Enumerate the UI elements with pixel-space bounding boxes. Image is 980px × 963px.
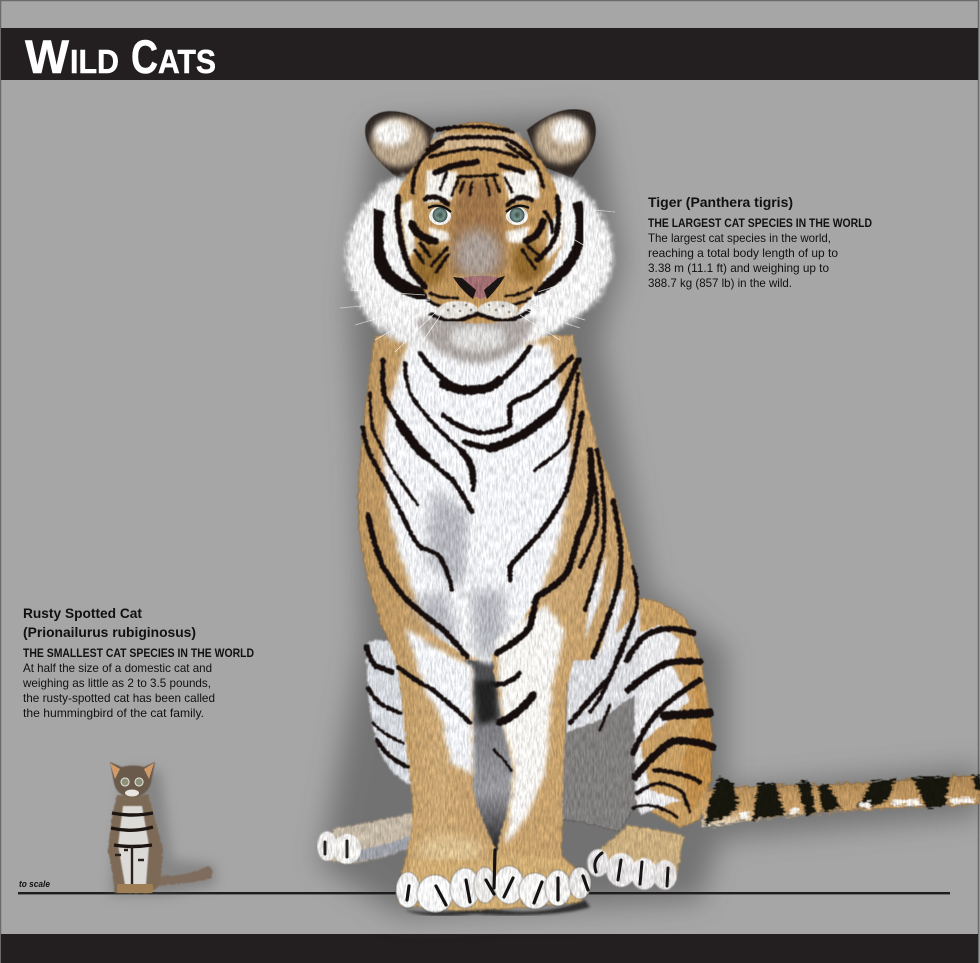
cat eyes [121,778,143,786]
nose [453,276,505,299]
cat subheading: THE SMALLEST CAT SPECIES IN THE WORLD [23,646,254,660]
tiger description: 3.38 m (11.1 ft) and weighing up to [648,261,829,275]
face base [397,122,564,324]
tiger description: reaching a total body length of up to [648,246,838,260]
cat description [22,661,215,720]
rear right paw [596,825,684,880]
chest center seam [464,510,476,640]
cat name: Rusty Spotted Cat [23,605,142,621]
right flank white bands [585,555,626,660]
cat leg lines [115,846,144,885]
tiger text block [648,194,872,290]
cat description: the hummingbird of the cat family. [23,706,204,720]
tiger stripes [363,347,713,817]
cat chest [118,806,149,885]
center gap between front legs [468,650,520,850]
left foot light patch [416,836,484,864]
title: ILD [70,43,119,80]
cat description: At half the size of a domestic cat and [23,661,212,675]
front right leg [492,600,590,895]
white mane [345,160,614,355]
left ear [365,111,435,178]
cheek tan patches [413,242,544,285]
whiskers [340,210,615,352]
rear right toes [587,849,677,890]
rusty spotted cat text block [22,605,254,720]
tiger head [340,109,615,364]
chest grey shading [412,490,505,660]
cat head [110,762,155,797]
footer band [1,934,978,963]
tiger subheading: THE LARGEST CAT SPECIES IN THE WORLD [648,216,872,230]
rear left toes [317,831,361,864]
right ear [527,109,596,178]
left cheek bars [376,210,427,295]
cat description: the rusty-spotted cat has been called [23,691,215,705]
tiger name: Tiger (Panthera tigris) [648,194,793,210]
cat muzzle [125,790,139,796]
muzzle pads [438,301,518,319]
rear left paw [325,812,418,864]
header band [1,28,978,80]
tiger description: The largest cat species in the world, [648,231,831,245]
left eye [428,206,451,225]
cat name: (Prionailurus rubiginosus) [23,624,196,640]
right eye [506,206,529,225]
right cheek bars [533,202,581,292]
title: W [25,30,70,83]
rear left haunch [367,639,420,790]
forehead and eye whites [400,133,566,262]
front paws [396,850,592,913]
ground line [18,892,950,894]
dark fold between legs [474,680,498,725]
cat stripes [111,813,153,846]
cat description: weighing as little as 2 to 3.5 pounds, [22,676,211,690]
tiger illustration [317,109,980,916]
cat tail [155,866,213,886]
tiger description [648,231,838,290]
torso [358,335,640,660]
rear right haunch [570,596,713,828]
muzzle patch [454,229,502,279]
cat shadow [110,770,215,895]
ground contact shadow [405,900,590,916]
cat body [108,795,163,893]
tiger drop shadow [320,115,980,915]
title: C [131,30,158,83]
face stripes [398,126,559,307]
left leg white fur [405,628,473,775]
right leg white fur [496,605,565,845]
cat ears [110,763,154,779]
chest white fur [384,340,571,665]
tiger tail [700,775,980,828]
tiger description: 388.7 kg (857 lb) in the wild. [648,276,792,290]
belly shadow between legs [560,695,636,832]
nose bridge [450,180,505,275]
throat fluff [415,312,535,364]
front left leg [380,620,495,900]
flank under torso [565,600,640,740]
mouth line [430,310,530,321]
title: ATS [158,43,216,80]
to scale label: to scale [19,879,50,889]
rusty spotted cat illustration [108,762,215,895]
cat paws [117,884,153,893]
